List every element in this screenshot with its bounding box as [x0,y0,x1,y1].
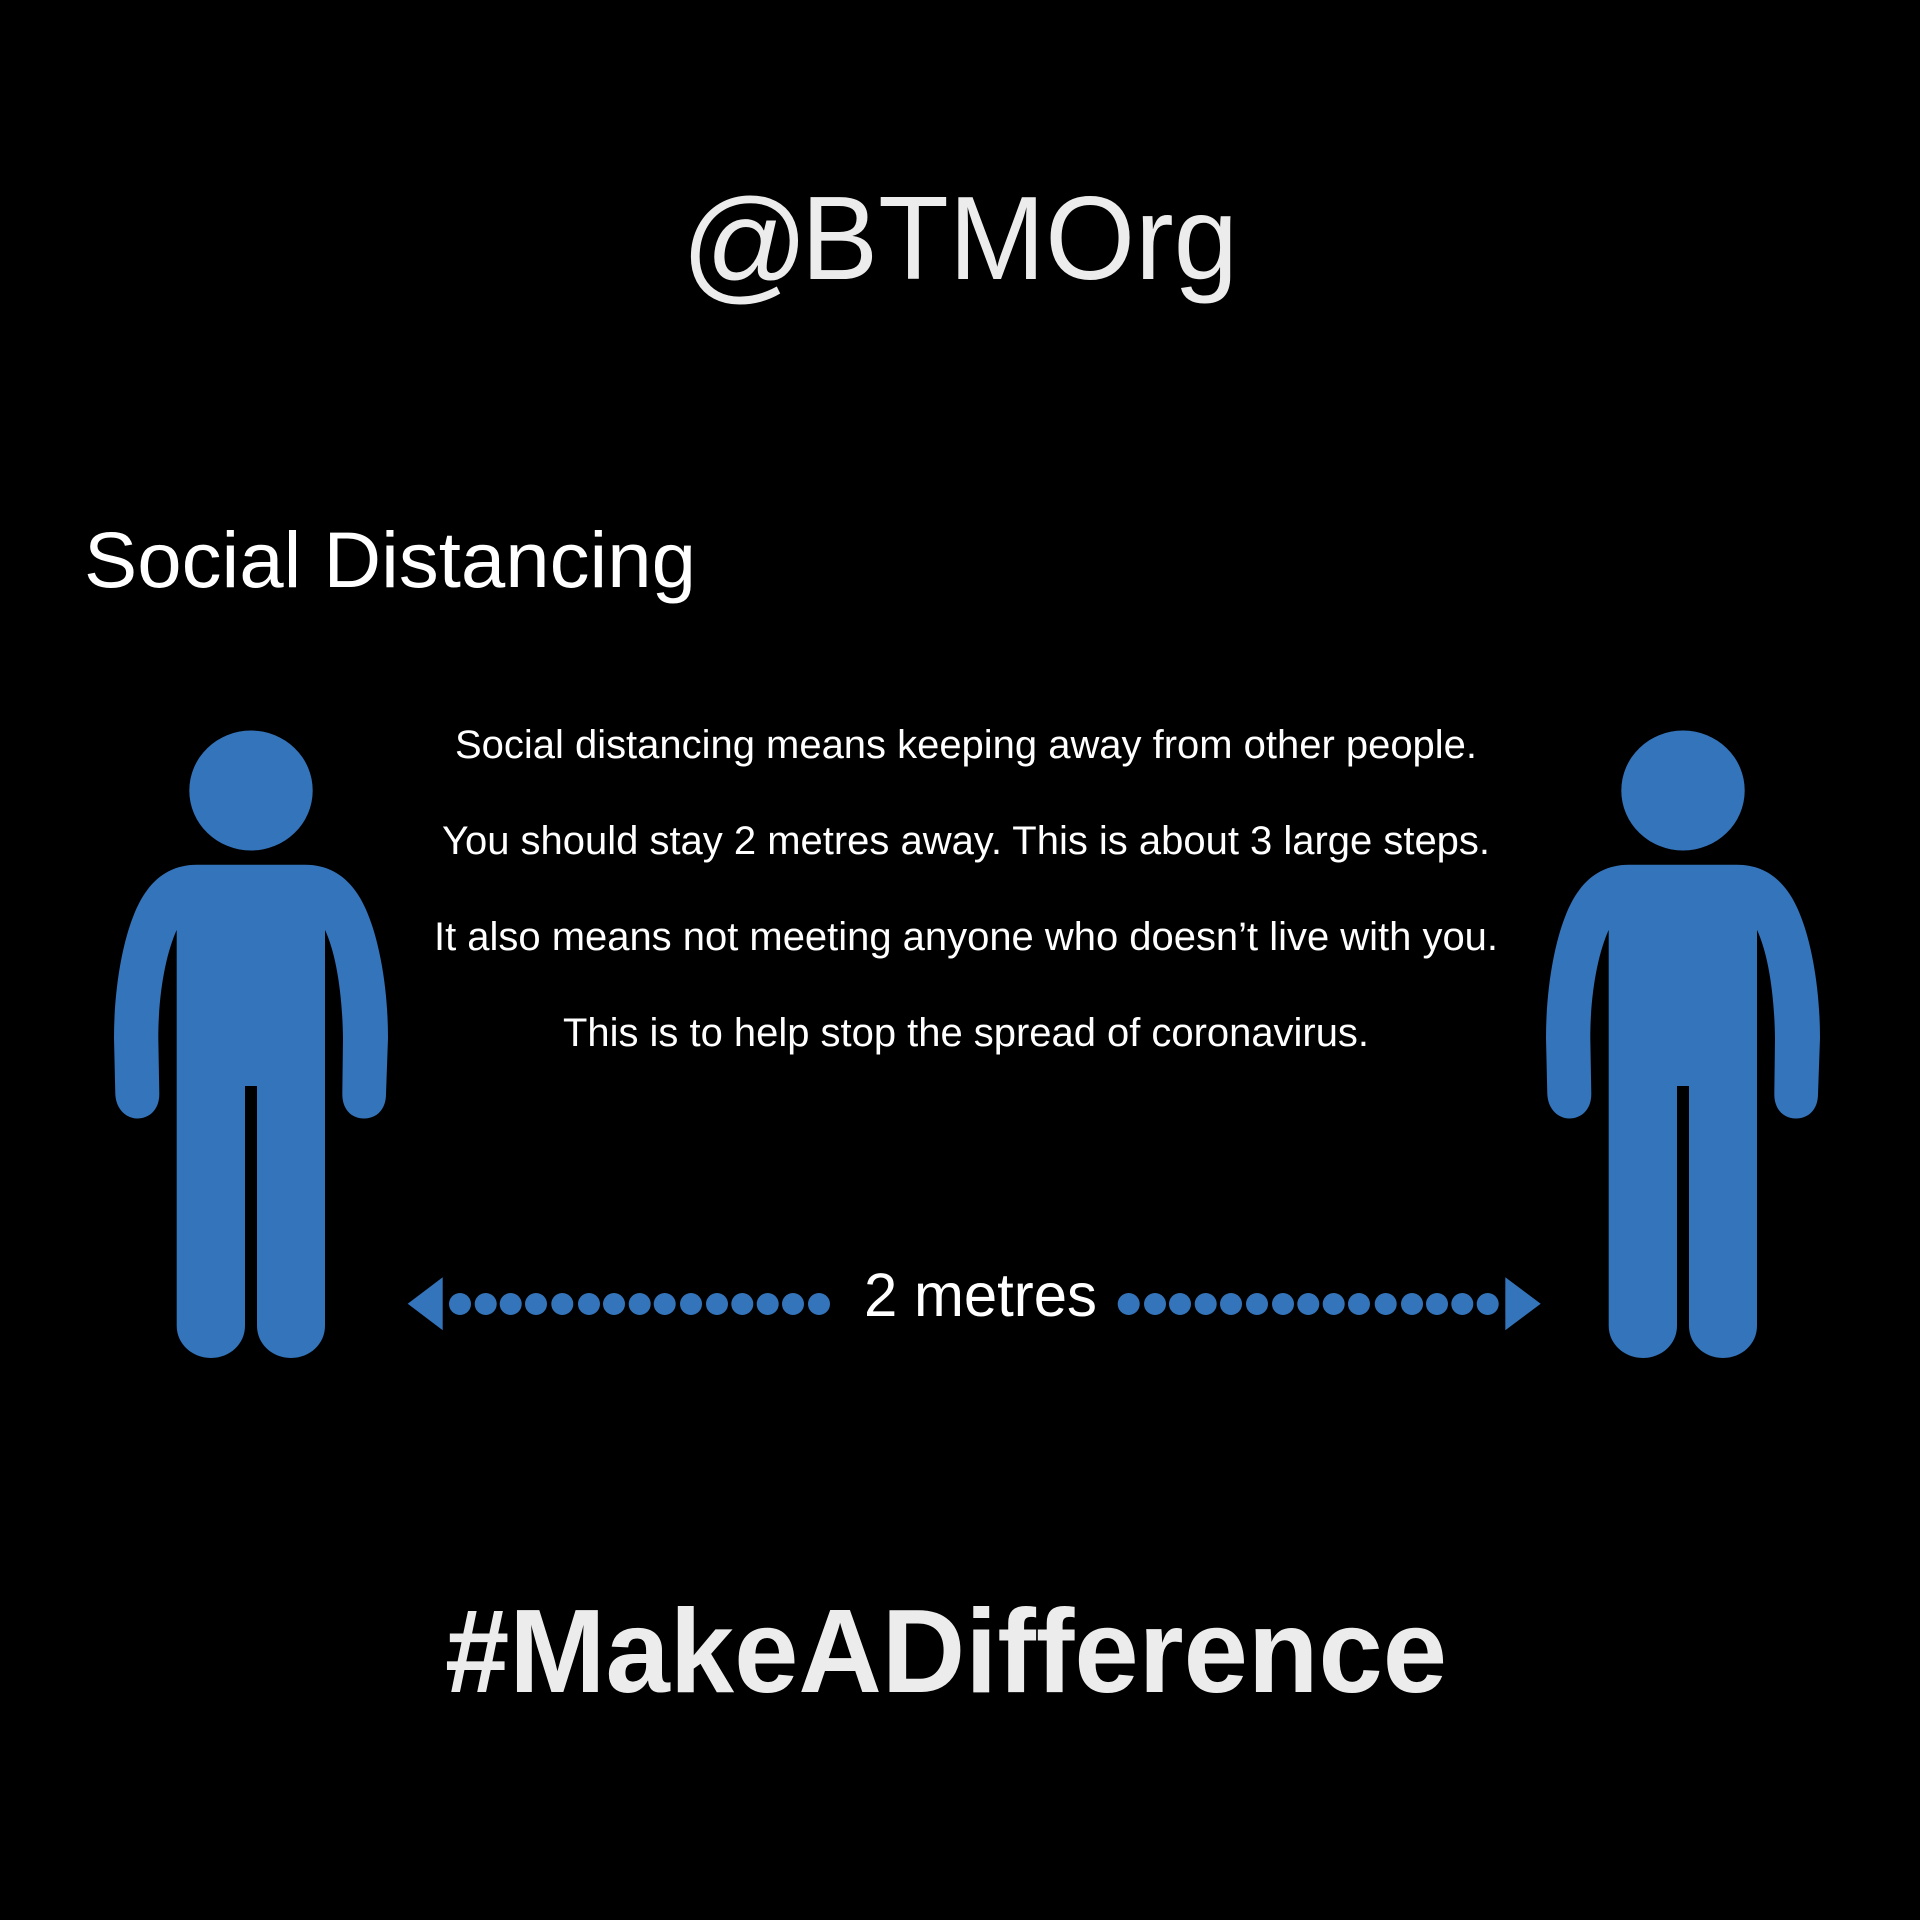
text line 1: Social distancing means keeping away from other people. [455,723,1477,767]
hashtag: #MakeADifference: #MakeADifference [445,1585,1447,1718]
text block: social distancing explanation [434,723,1498,1055]
icon: right person [1546,730,1820,1358]
text line 2: You should stay 2 metres away. This is about 3 large steps. [442,819,1490,863]
arrow: right dotted [1118,1277,1541,1330]
label: 2 metres: 2 metres [864,1261,1097,1329]
text line 3: It also means not meeting anyone who doesn’t live with you. [434,915,1498,959]
text line 4: This is to help stop the spread of coronavirus. [563,1011,1369,1055]
title: @BTMOrg: @ [681,173,809,314]
icon: left person [114,730,388,1358]
title: @BTMOrg: BTMOrg [801,172,1238,305]
heading: Social Distancing: Social Distancing [84,515,696,604]
arrow: left dotted [408,1277,830,1330]
